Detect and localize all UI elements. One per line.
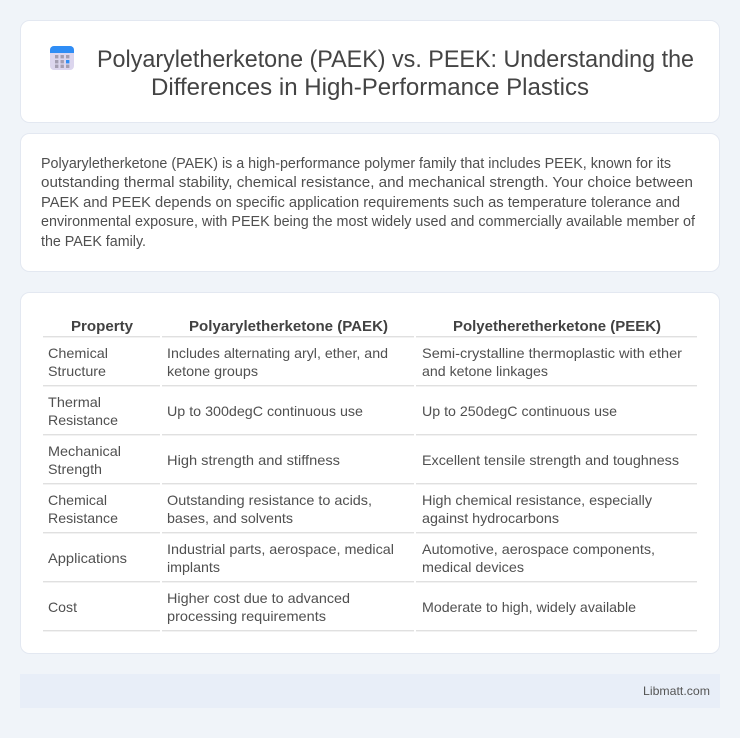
row: applications (48, 541, 655, 575)
row: mechanical strength: Mechanical (48, 443, 121, 459)
row: mechanical strength: Strength (48, 461, 102, 477)
row: chemical resistance (48, 492, 652, 526)
row: thermal resistance (48, 394, 617, 428)
row: mechanical strength: High strength and stiffness (167, 452, 340, 468)
row: chemical resistance: Resistance (48, 510, 118, 526)
row: applications: implants (167, 559, 220, 575)
row: chemical structure: Semi-crystalline thermoplastic with ether (422, 345, 682, 361)
row: chemical structure: Chemical (48, 345, 108, 361)
row: cost: Higher cost due to advanced (167, 590, 350, 606)
row: chemical resistance: against hydrocarbons (422, 510, 559, 526)
row: cost: processing requirements (167, 608, 326, 624)
row: mechanical strength: Excellent tensile strength and toughness (422, 452, 679, 468)
icon: calendar (50, 46, 74, 70)
panel: header (20, 20, 720, 122)
table header: Property (71, 319, 133, 335)
row: applications: medical devices (422, 559, 524, 575)
row: chemical structure: Structure (48, 363, 106, 379)
panel: introduction (20, 134, 720, 272)
row: cost (48, 590, 636, 624)
row: chemical resistance: bases, and solvents (167, 510, 293, 526)
row: cost: Moderate to high, widely available (422, 599, 636, 615)
panel: comparison table (20, 292, 720, 654)
title (97, 46, 694, 101)
text block: introduction: Polyaryletherketone (PAEK) is a high-performance polymer family that includes PEEK, known for its (41, 156, 671, 172)
row: chemical resistance: High chemical resistance, especially (422, 492, 652, 508)
footer: Libmatt.com (643, 684, 710, 698)
table header: Polyetheretherketone (PEEK) (453, 319, 661, 335)
title: Polyaryletherketone (PAEK) vs. PEEK: Understanding the (97, 46, 694, 73)
title: Differences in High-Performance Plastics (151, 74, 589, 101)
text block: introduction: environmental exposure, with PEEK being the most widely used and commercially available member of (41, 214, 696, 230)
row: chemical resistance: Outstanding resistance to acids, (167, 492, 372, 508)
row: thermal resistance: Up to 250degC continuous use (422, 403, 617, 419)
table header (71, 319, 661, 335)
row: chemical structure (48, 345, 682, 379)
row: chemical structure: Includes alternating aryl, ether, and (167, 345, 388, 361)
text block: introduction: PAEK and PEEK depends on specific application requirements such as temperature tolerance and (41, 195, 680, 211)
text block: introduction: outstanding thermal stability, chemical resistance, and mechanical strength. Your choice between (41, 175, 693, 191)
row: mechanical strength (48, 443, 679, 477)
row: chemical resistance: Chemical (48, 492, 107, 508)
row: thermal resistance: Thermal (48, 394, 101, 410)
row: chemical structure: ketone groups (167, 363, 258, 379)
row: applications: Applications (48, 550, 127, 566)
footer (20, 674, 720, 708)
row: cost: Cost (48, 599, 77, 615)
row: chemical structure: and ketone linkages (422, 363, 548, 379)
row: applications: Automotive, aerospace components, (422, 541, 655, 557)
text block: introduction: the PAEK family. (41, 234, 146, 250)
row: thermal resistance: Resistance (48, 412, 118, 428)
text block: introduction (41, 156, 696, 250)
row: thermal resistance: Up to 300degC continuous use (167, 403, 363, 419)
table header: Polyaryletherketone (PAEK) (189, 319, 388, 335)
row: applications: Industrial parts, aerospace, medical (167, 541, 394, 557)
